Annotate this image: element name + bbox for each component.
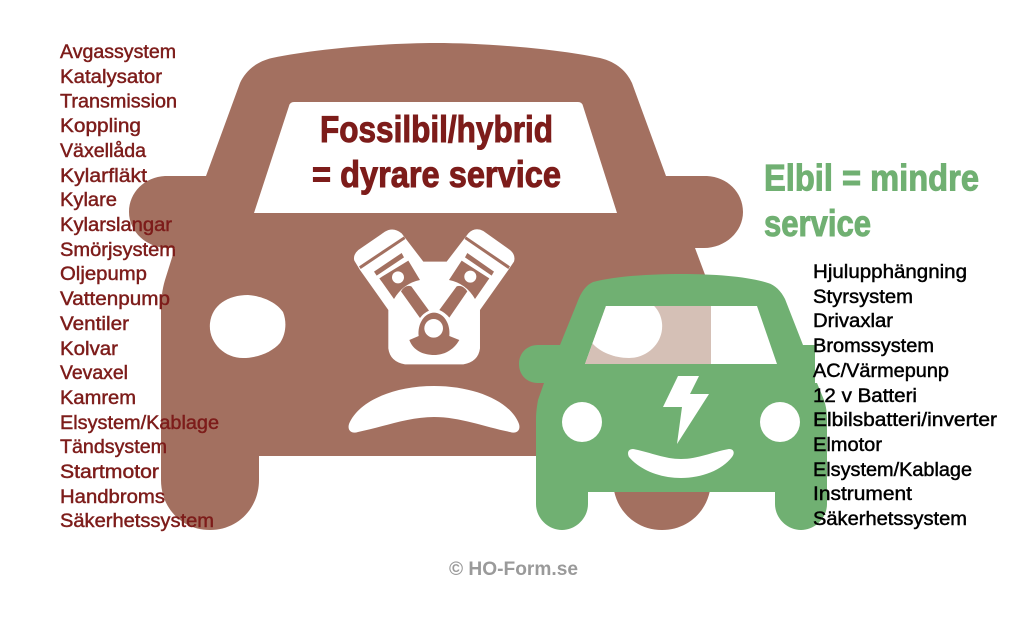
- heading: fossil car: [312, 109, 561, 195]
- left headlight: [562, 402, 602, 442]
- list: electric car parts: [813, 262, 998, 530]
- right headlight: [760, 402, 800, 442]
- list: electric car parts: Elmotor: [813, 435, 883, 456]
- list: fossil car parts: Elsystem/Kablage: [60, 413, 219, 434]
- electric car: [519, 274, 827, 530]
- car body: green: [519, 274, 827, 530]
- windshield tint over brown car: [585, 306, 711, 364]
- list: fossil car parts: Kylarslangar: [60, 215, 173, 236]
- list: fossil car parts: Avgassystem: [60, 42, 176, 63]
- list: fossil car parts: Tändsystem: [60, 437, 167, 458]
- list: fossil car parts: Handbroms: [60, 487, 165, 508]
- list: fossil car parts: Växellåda: [60, 141, 146, 162]
- car body: brown: [129, 43, 743, 530]
- list: fossil car parts: Vattenpump: [60, 289, 170, 310]
- list: electric car parts: Elbilsbatteri/inverter: [813, 410, 998, 431]
- list: electric car parts: Styrsystem: [813, 287, 913, 308]
- copyright: © HO-Form.se: [449, 559, 578, 580]
- list: fossil car parts: Koppling: [60, 116, 141, 137]
- list: electric car parts: Drivaxlar: [813, 311, 894, 332]
- list: fossil car parts: Ventiler: [60, 314, 130, 335]
- heading: fossil car: Fossilbil/hybrid: [320, 109, 553, 150]
- list: fossil car parts: Startmotor: [60, 462, 160, 483]
- list: electric car parts: Bromssystem: [813, 336, 934, 357]
- icon: engine: [354, 229, 514, 364]
- list: electric car parts: 12 v Batteri: [813, 386, 917, 407]
- list: electric car parts: Hjulupphängning: [813, 262, 967, 283]
- list: fossil car parts: Transmission: [60, 92, 177, 112]
- list: fossil car parts: Kolvar: [60, 339, 119, 360]
- heading: electric car: [764, 158, 979, 244]
- left headlight: [210, 295, 285, 358]
- list: fossil car parts: Kylarfläkt: [60, 166, 148, 187]
- smile: [628, 449, 734, 478]
- list: fossil car parts: [60, 42, 219, 532]
- list: electric car parts: Säkerhetssystem: [813, 509, 967, 530]
- heading: electric car: service: [764, 203, 871, 244]
- list: electric car parts: Instrument: [813, 484, 913, 505]
- list: fossil car parts: Kylare: [60, 190, 117, 211]
- list: fossil car parts: Smörjsystem: [60, 240, 176, 261]
- fossil car: [129, 43, 743, 530]
- icon: lightning bolt: [663, 376, 709, 444]
- list: fossil car parts: Säkerhetssystem: [60, 511, 214, 532]
- heading: fossil car: = dyrare service: [312, 154, 561, 195]
- list: fossil car parts: Katalysator: [60, 67, 163, 88]
- list: electric car parts: AC/Värmepunp: [813, 361, 949, 382]
- list: fossil car parts: Vevaxel: [60, 363, 128, 384]
- windshield: [585, 306, 777, 364]
- frown: [349, 386, 519, 433]
- list: electric car parts: Elsystem/Kablage: [813, 460, 972, 481]
- windshield: [254, 102, 617, 213]
- heading: electric car: Elbil = mindre: [764, 158, 979, 198]
- list: fossil car parts: Oljepump: [60, 264, 147, 285]
- brown car headlight seen through windshield: [592, 306, 662, 358]
- list: fossil car parts: Kamrem: [60, 388, 136, 409]
